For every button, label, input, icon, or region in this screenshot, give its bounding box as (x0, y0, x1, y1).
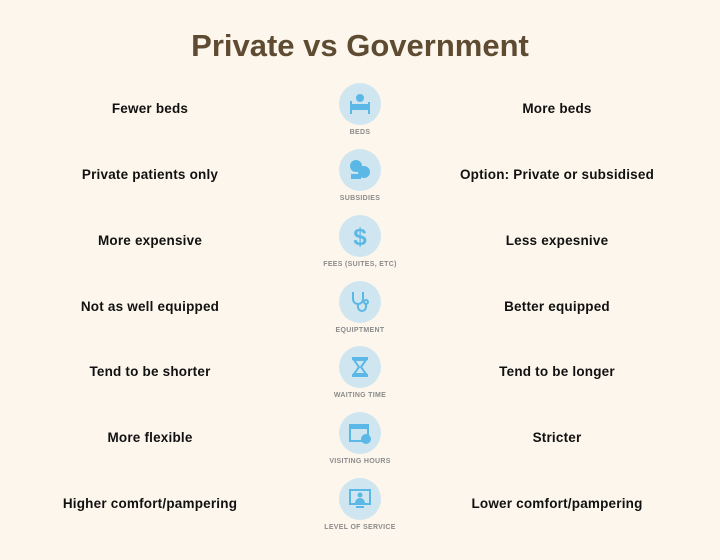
row: beds (112, 83, 592, 136)
row: equipment: EQUIPTMENT (336, 327, 384, 334)
row: fees: FEES (SUITES, ETC) (323, 261, 397, 268)
row: subsidies: Private patients only (82, 167, 218, 182)
icon: hourglass (339, 346, 381, 388)
row: subsidies: Option: Private or subsidised (460, 167, 654, 182)
title: Private vs Government (191, 28, 529, 63)
icon: dollar (339, 215, 381, 257)
row: waiting time: Tend to be longer (499, 364, 615, 379)
row: beds: More beds (522, 101, 592, 116)
row: visiting hours: More flexible (107, 430, 193, 445)
row: equipment: Better equipped (504, 299, 610, 314)
row: beds: BEDS (350, 129, 370, 136)
row: equipment: Not as well equipped (81, 299, 219, 314)
icon: stethoscope (339, 281, 381, 323)
row: visiting hours (107, 412, 582, 465)
row: level of service: LEVEL OF SERVICE (324, 524, 396, 531)
row: level of service: Higher comfort/pampering (63, 496, 237, 511)
row: waiting time: Tend to be shorter (89, 364, 211, 379)
icon: monitor person (339, 478, 381, 520)
row: level of service: Lower comfort/pampering (471, 496, 643, 511)
row: visiting hours: Stricter (533, 430, 581, 445)
row: fees: More expensive (98, 233, 202, 248)
row: fees: Less expesnive (506, 233, 608, 248)
row: waiting time: WAITING TIME (334, 392, 386, 399)
row: subsidies (82, 149, 654, 202)
icon: bed (339, 83, 381, 125)
row: waiting time (89, 346, 615, 399)
row: subsidies: SUBSIDIES (340, 195, 380, 202)
row: visiting hours: VISITING HOURS (329, 458, 391, 465)
row: level of service (63, 478, 643, 531)
row: fees (98, 215, 608, 268)
icon: coins (339, 149, 381, 191)
icon: calendar (339, 412, 381, 454)
row: beds: Fewer beds (112, 101, 188, 116)
row: equipment (81, 281, 610, 334)
